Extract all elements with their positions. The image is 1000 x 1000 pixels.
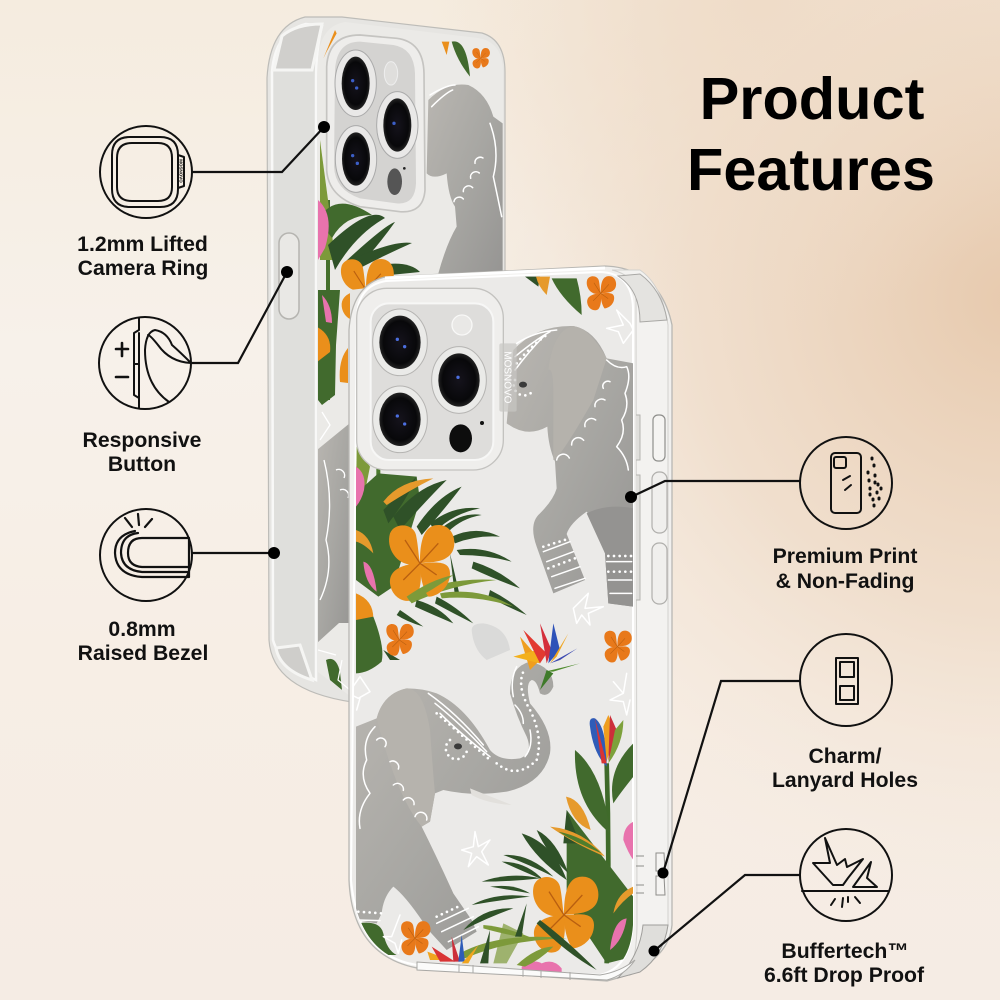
back phone case	[267, 17, 506, 702]
lens bottom	[373, 386, 427, 453]
bottom right corner bumper	[618, 925, 668, 978]
connector: camera ring	[192, 121, 330, 172]
icon: premium print	[800, 437, 892, 529]
lower right plant	[460, 715, 633, 973]
front case body	[349, 266, 672, 981]
back camera module	[327, 35, 425, 212]
flash	[452, 315, 472, 335]
label: raised bezel: Raised Bezel	[78, 642, 208, 665]
icon: charm holes	[800, 634, 892, 726]
icon: camera ring	[100, 126, 192, 218]
label: premium print: Premium Print	[773, 545, 917, 568]
volume down button	[652, 543, 667, 604]
icon: responsive button	[99, 317, 191, 409]
back corner bumper top	[274, 24, 322, 70]
label: camera ring: 1.2mm Lifted	[77, 233, 208, 256]
label: premium print: & Non-Fading	[776, 570, 914, 593]
back case body	[267, 17, 505, 702]
back phone print	[316, 20, 506, 700]
connector: drop proof	[648, 875, 800, 956]
front side buttons and details	[385, 268, 668, 980]
lower elephant	[356, 662, 553, 950]
right side flowers and bird of paradise	[462, 623, 632, 867]
apple logo shadow	[472, 623, 510, 660]
back top leaf and flower	[323, 30, 490, 77]
connector: raised bezel	[192, 547, 280, 559]
microphone	[480, 421, 484, 425]
label: drop proof: 6.6ft Drop Proof	[764, 964, 925, 987]
label: raised bezel	[78, 618, 208, 665]
top edge highlight	[385, 268, 605, 278]
title: Features	[687, 136, 935, 203]
top right corner bumper	[618, 274, 667, 322]
top leaves and flower	[525, 276, 633, 625]
label: raised bezel: 0.8mm	[108, 618, 176, 641]
label: charm holes: Charm/	[808, 745, 882, 768]
back corner bumper bottom	[276, 645, 312, 680]
connector: charm holes	[658, 681, 800, 878]
lanyard holes	[636, 853, 665, 895]
sensor	[449, 424, 472, 452]
title	[687, 65, 935, 203]
connector: premium print	[625, 481, 800, 503]
label: premium print	[773, 545, 917, 593]
connector: responsive button	[192, 266, 293, 363]
back elephant	[427, 84, 503, 273]
label: charm holes	[772, 745, 918, 792]
button inner seams	[636, 415, 640, 600]
icon: camera ring: MOSNOVO	[178, 159, 184, 183]
bottom edge segments	[417, 960, 635, 980]
back plant column	[317, 140, 420, 405]
lower left corner plant	[358, 915, 478, 963]
brand tab: MOSNOVO	[502, 351, 513, 404]
title: Product	[700, 65, 925, 132]
upper elephant	[507, 326, 633, 607]
front print artwork	[348, 276, 633, 973]
back case side band	[272, 24, 322, 680]
icon: raised bezel	[100, 509, 192, 601]
lens right	[432, 347, 486, 413]
front case right side band	[612, 270, 668, 975]
back volume button	[279, 233, 299, 319]
left plant lower part	[348, 617, 414, 710]
upper left plant	[356, 447, 527, 628]
label: responsive button	[83, 429, 202, 476]
action button	[653, 415, 665, 461]
label: camera ring: Camera Ring	[78, 257, 208, 280]
lens top	[373, 309, 427, 376]
icon: drop proof	[800, 829, 892, 921]
label: drop proof: Buffertech™	[781, 940, 909, 963]
front camera module	[357, 288, 517, 470]
volume up button	[652, 472, 667, 533]
label: drop proof	[764, 940, 925, 987]
front phone case	[348, 266, 672, 981]
front print background	[351, 272, 633, 975]
label: charm holes: Lanyard Holes	[772, 769, 918, 792]
label: responsive button: Button	[108, 453, 176, 476]
back lower plant	[326, 659, 350, 690]
label: responsive button: Responsive	[83, 429, 202, 452]
back lower elephant	[317, 412, 350, 655]
label: camera ring	[77, 233, 208, 280]
brand tab	[499, 343, 517, 412]
